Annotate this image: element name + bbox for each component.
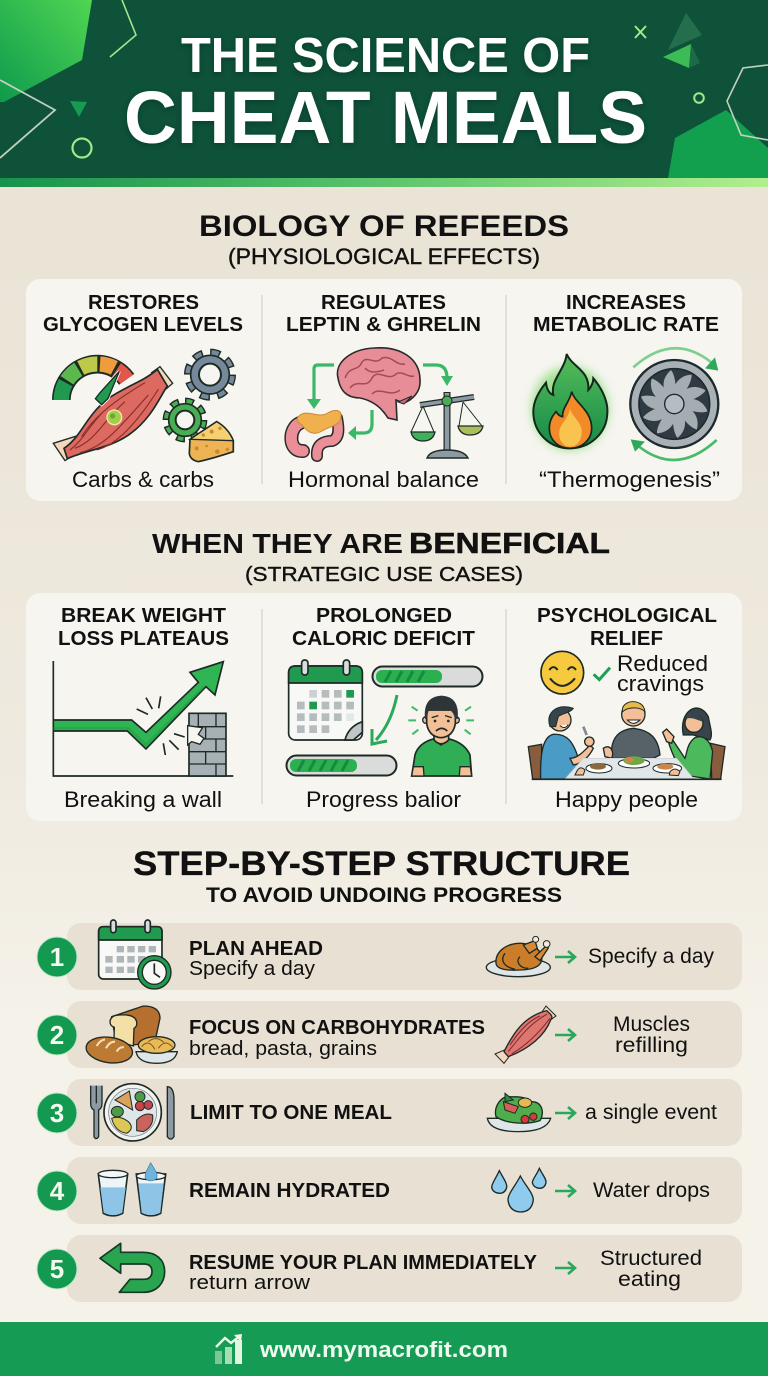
number badge 5: [37, 1249, 77, 1289]
number badge 3: 3: [50, 1098, 64, 1128]
heading: when they are beneficial: (STRATEGIC USE CASES): [245, 564, 523, 586]
card: psychological relief: Happy people: [555, 787, 698, 812]
card: caloric deficit: PROLONGED: [316, 605, 452, 627]
heading: step-by-step structure: STEP-BY-STEP STRUCTURE: [133, 845, 630, 883]
text: resume your plan: [189, 1252, 538, 1294]
heading: biology of refeeds: (PHYSIOLOGICAL EFFECTS): [228, 244, 540, 269]
text: water drops: Water drops: [593, 1179, 710, 1202]
step 1: plan ahead: [37, 920, 742, 990]
heading: when they are beneficial: WHEN THEY ARE: [152, 528, 403, 559]
icon: gauge, muscle, gears and cheese: [53, 354, 233, 462]
card: metabolic rate: INCREASES: [566, 292, 686, 314]
icon: roast chicken: [486, 936, 550, 977]
card: psychological relief: RELIEF: [590, 628, 663, 650]
card: leptin and ghrelin: Hormonal balance: [288, 467, 479, 492]
card: psychological relief: Reduced: [617, 651, 708, 676]
card: metabolic rate: [533, 292, 720, 492]
card: caloric deficit: [292, 605, 475, 812]
heading: when they are beneficial: BENEFICIAL: [409, 528, 610, 560]
text: specify a day: Specify a day: [588, 945, 714, 968]
step 5: resume your plan: [37, 1235, 742, 1302]
card: restores glycogen: Carbs & carbs: [72, 467, 214, 492]
card: psychological relief: [537, 605, 717, 812]
icon: return arrow: [100, 1243, 165, 1292]
header banner: [0, 0, 768, 187]
step 4: remain hydrated: [37, 1157, 742, 1224]
number badge 4: 4: [50, 1176, 65, 1206]
heading: step-by-step structure: [133, 845, 630, 907]
card: caloric deficit: Progress balior: [306, 787, 461, 812]
arrow: [555, 1185, 575, 1197]
card: psychological relief: PSYCHOLOGICAL: [537, 605, 717, 627]
panel: biology of refeeds: [26, 279, 742, 501]
card: plateaus: Breaking a wall: [64, 787, 222, 812]
icon: plate with cutlery: [91, 1084, 174, 1141]
icon: water glasses: [98, 1163, 166, 1216]
panel: when they are beneficial: [26, 593, 742, 821]
number badge 2: [37, 1015, 77, 1055]
card: plateaus: BREAK WEIGHT: [61, 605, 226, 627]
title: THE SCIENCE OF: [181, 29, 590, 83]
icon: tired person: [408, 696, 474, 776]
icon: muscle: [495, 1006, 556, 1063]
card: caloric deficit: CALORIC DEFICIT: [292, 628, 475, 650]
arrow: [555, 1107, 575, 1119]
number badge 2: 2: [50, 1020, 64, 1050]
card: leptin and ghrelin: REGULATES: [321, 292, 446, 314]
heading: when they are beneficial: [152, 528, 610, 586]
arrow: [555, 951, 575, 963]
icon: calendar with clock: [99, 920, 171, 989]
text: remain hydrated: REMAIN HYDRATED: [189, 1180, 390, 1202]
arrow: [555, 1029, 575, 1041]
heading: step-by-step structure: TO AVOID UNDOING PROGRESS: [206, 884, 562, 907]
heading: biology of refeeds: [199, 210, 569, 269]
card: restores glycogen: GLYCOGEN LEVELS: [43, 314, 243, 336]
icon: growth chart: [215, 1334, 242, 1364]
text: plan ahead: [189, 938, 323, 980]
arrow: [555, 1262, 575, 1274]
title: CHEAT MEALS: [124, 76, 647, 159]
step 2: focus on carbohydrates: [37, 1001, 742, 1068]
text: plan ahead: PLAN AHEAD: [189, 938, 323, 960]
card: leptin and ghrelin: LEPTIN & GHRELIN: [286, 314, 481, 336]
footer: [0, 1322, 768, 1376]
text: muscles refilling: Muscles: [613, 1013, 690, 1036]
card: psychological relief: cravings: [617, 671, 704, 696]
text: focus on carbohydrates: FOCUS ON CARBOHYDRATES: [189, 1017, 485, 1039]
text: focus on carbohydrates: [189, 1017, 485, 1060]
text: a single event: a single event: [585, 1101, 717, 1124]
number badge 4: [37, 1171, 77, 1211]
heading: biology of refeeds: BIOLOGY OF REFEEDS: [199, 210, 569, 243]
text: resume your plan: RESUME YOUR PLAN IMMEDIATELY: [189, 1252, 538, 1274]
title: [124, 29, 647, 159]
card: metabolic rate: “Thermogenesis”: [539, 467, 720, 492]
card: plateaus: LOSS PLATEAUS: [58, 628, 229, 650]
website url: www.mymacrofit.com: [259, 1337, 508, 1362]
arrow: progress down: [372, 695, 397, 744]
text: muscles refilling: [613, 1013, 690, 1057]
icon: smiley and check: [541, 651, 610, 694]
text: structured eating: eating: [618, 1268, 681, 1291]
text: resume your plan: return arrow: [189, 1272, 311, 1294]
text: limit to one meal: LIMIT TO ONE MEAL: [190, 1102, 392, 1124]
icon: flame and turbine: [532, 348, 718, 460]
number badge 5: 5: [50, 1254, 64, 1284]
card: metabolic rate: METABOLIC RATE: [533, 314, 719, 336]
progress bar: top: [372, 666, 482, 686]
icon: calendar: [289, 660, 362, 740]
text: muscles refilling: refilling: [615, 1034, 688, 1057]
icon: water drops: [492, 1168, 546, 1212]
step 3: limit to one meal: [37, 1079, 742, 1146]
text: plan ahead: Specify a day: [189, 957, 316, 980]
number badge 1: [37, 937, 77, 977]
text: structured eating: [600, 1247, 702, 1291]
icon: bread and pasta: [84, 1006, 177, 1066]
card: plateaus: [58, 605, 229, 812]
chart: arrow breaking through wall: [53, 661, 233, 776]
illustration: friends at dinner table: [528, 702, 725, 779]
card: restores glycogen: RESTORES: [88, 292, 199, 314]
icon: brain, gut and scale with arrows: [291, 348, 483, 458]
text: focus on carbohydrates: bread, pasta, grains: [189, 1038, 377, 1060]
icon: salad plate: [487, 1093, 551, 1132]
card: restores glycogen: [43, 292, 243, 492]
number badge 1: 1: [50, 942, 64, 972]
progress bar: bottom: [286, 756, 396, 776]
card: leptin and ghrelin: [286, 292, 481, 492]
text: structured eating: Structured: [600, 1247, 702, 1270]
number badge 3: [37, 1093, 77, 1133]
